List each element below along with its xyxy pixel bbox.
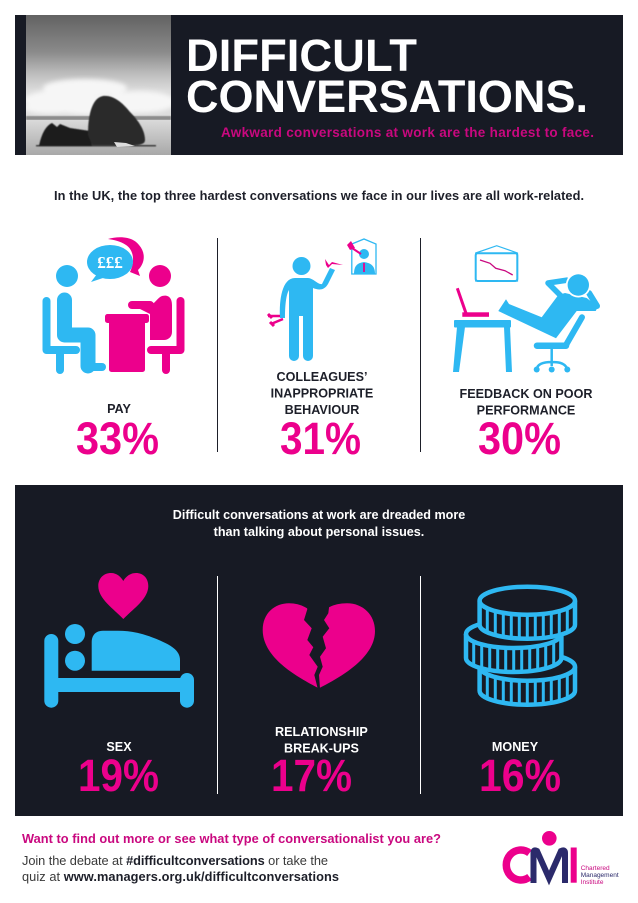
intro sentence: In the UK, the top three hardest conversations we face in our lives are all work-related. xyxy=(54,188,584,203)
icon: man reclining with feet on desk xyxy=(453,246,598,372)
panel heading: than talking about personal issues. xyxy=(214,525,424,539)
label: FEEDBACK ON POOR xyxy=(460,387,592,401)
footer text xyxy=(22,853,339,884)
label: MONEY xyxy=(492,740,539,754)
title xyxy=(186,30,588,122)
sub-panel: money xyxy=(466,587,575,801)
footer text: quiz at www.managers.org.uk/difficultconversations xyxy=(22,869,339,884)
footer call to action xyxy=(22,831,441,884)
percentage: 19% xyxy=(78,750,159,801)
sub-panel: sex xyxy=(44,573,194,801)
CMI logo: Chartered xyxy=(581,865,610,872)
CMI logo xyxy=(506,831,619,886)
header banner xyxy=(15,15,623,155)
footer heading: Want to find out more or see what type of conversationalist you are? xyxy=(22,831,441,846)
panel: personal issues xyxy=(15,485,623,816)
panel: colleagues xyxy=(268,239,376,464)
title: CONVERSATIONS. xyxy=(186,71,588,122)
percentage: 17% xyxy=(271,750,352,801)
icon: stack of coins xyxy=(466,587,575,705)
title: DIFFICULT xyxy=(186,30,417,81)
label: PERFORMANCE xyxy=(477,404,575,418)
percentage: 30% xyxy=(478,413,561,464)
icon: two people talking across desk xyxy=(46,237,180,372)
label: INAPPROPRIATE xyxy=(271,386,373,400)
label: COLLEAGUES’ xyxy=(277,370,367,384)
panel heading: Difficult conversations at work are dreaded more xyxy=(173,508,465,522)
photo: man with head in the sand xyxy=(24,15,176,155)
icon: two people talking across desk: £££ xyxy=(97,253,123,272)
percentage: 33% xyxy=(76,413,159,464)
panel: pay xyxy=(46,237,180,464)
footer text: Join the debate at #difficultconversations or take the xyxy=(22,853,328,868)
percentage: 31% xyxy=(280,413,361,464)
icon: broken heart xyxy=(263,600,375,688)
icon: man throwing darts at portrait xyxy=(268,239,376,361)
label: BEHAVIOUR xyxy=(285,403,359,417)
CMI logo: Institute xyxy=(581,879,604,886)
CMI logo: Management xyxy=(581,872,619,879)
percentage: 16% xyxy=(479,750,561,801)
panel: feedback xyxy=(453,246,598,464)
icon: heart above bed xyxy=(44,573,194,708)
label: SEX xyxy=(106,740,132,754)
label: PAY xyxy=(107,402,131,416)
label: BREAK-UPS xyxy=(284,742,359,756)
label: RELATIONSHIP xyxy=(275,725,368,739)
sub-panel: relationship break-ups xyxy=(263,600,375,801)
subtitle: Awkward conversations at work are the hardest to face. xyxy=(221,125,594,140)
